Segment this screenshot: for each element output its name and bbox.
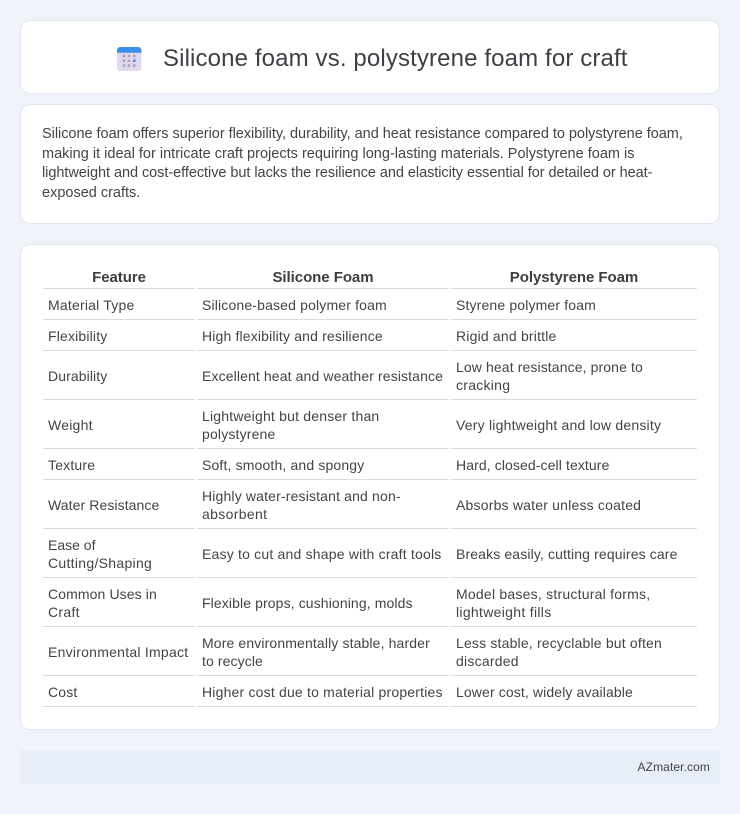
text: Weight (48, 417, 93, 433)
title: Silicone foam vs. polystyrene foam for craft (163, 45, 628, 72)
row: water resistance (43, 488, 697, 529)
text: Material Type (48, 297, 135, 313)
row: weight (43, 408, 697, 449)
footer bar (20, 750, 720, 784)
text: Hard, closed-cell texture (456, 457, 609, 473)
row: environmental impact (43, 635, 697, 676)
text: High flexibility and resilience (202, 328, 383, 344)
comparison table (43, 269, 697, 707)
text: making it ideal for intricate craft projects requiring long-lasting materials. Polystyrene foam is (42, 146, 635, 162)
text: Soft, smooth, and spongy (202, 457, 364, 473)
summary text (42, 126, 683, 201)
text: Rigid and brittle (456, 328, 557, 344)
text: Silicone foam offers superior flexibility, durability, and heat resistance compared to polystyrene foam, (42, 126, 683, 142)
text: Model bases, structural forms, (456, 586, 650, 602)
text: Breaks easily, cutting requires care (456, 546, 678, 562)
text: Highly water-resistant and non- (202, 488, 401, 504)
row: ease of cutting (43, 537, 697, 578)
text: Common Uses in (48, 586, 157, 602)
text: Cutting/Shaping (48, 555, 152, 571)
text: Absorbs water unless coated (456, 497, 641, 513)
text: Flexibility (48, 328, 107, 344)
row: cost (43, 684, 697, 707)
text: to recycle (202, 653, 263, 669)
text: discarded (456, 653, 519, 669)
text: Very lightweight and low density (456, 417, 661, 433)
text: Craft (48, 604, 80, 620)
text: Lightweight but denser than (202, 408, 379, 424)
text: Ease of (48, 537, 95, 553)
row: flexibility (43, 328, 697, 351)
table card (20, 244, 720, 730)
text: Environmental Impact (48, 644, 188, 660)
text: polystyrene (202, 426, 275, 442)
summary card (20, 104, 720, 224)
icon: calendar (117, 47, 142, 71)
text: Excellent heat and weather resistance (202, 368, 443, 384)
text: absorbent (202, 506, 267, 522)
text: Flexible props, cushioning, molds (202, 595, 413, 611)
text: Styrene polymer foam (456, 297, 596, 313)
text: Durability (48, 368, 107, 384)
text: Polystyrene Foam (510, 269, 638, 286)
row: texture (43, 457, 697, 480)
text: exposed crafts. (42, 185, 140, 201)
text: Feature (92, 269, 146, 286)
text: cracking (456, 377, 510, 393)
text: Less stable, recyclable but often (456, 635, 662, 651)
text: lightweight and cost-effective but lacks the resilience and elasticity essential for detailed or heat- (42, 165, 652, 181)
row: common uses (43, 586, 697, 627)
title card (20, 20, 720, 94)
text: lightweight fills (456, 604, 552, 620)
footer credit: AZmater.com (638, 760, 710, 774)
text: More environmentally stable, harder (202, 635, 430, 651)
text: Lower cost, widely available (456, 684, 633, 700)
text: Silicone-based polymer foam (202, 297, 387, 313)
text: Higher cost due to material properties (202, 684, 443, 700)
row: material type (43, 297, 697, 320)
text: Low heat resistance, prone to (456, 359, 643, 375)
text: Water Resistance (48, 497, 159, 513)
row: durability (43, 359, 697, 400)
text: Easy to cut and shape with craft tools (202, 546, 442, 562)
text: Cost (48, 684, 77, 700)
text: Texture (48, 457, 95, 473)
text: Silicone Foam (272, 269, 374, 286)
column headers (43, 269, 697, 289)
